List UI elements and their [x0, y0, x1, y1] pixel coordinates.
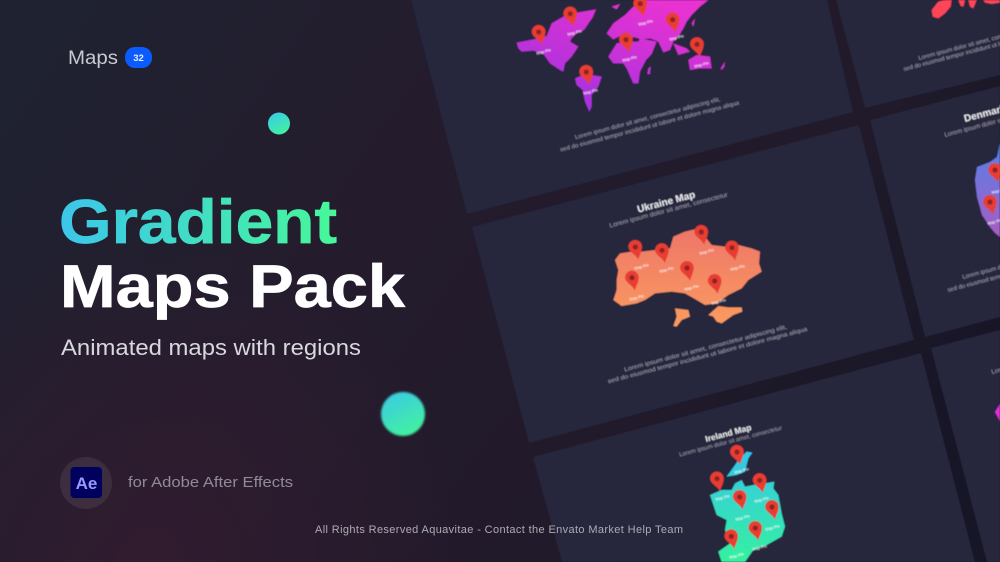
Ireland pin labels: Map Pin — [765, 523, 780, 532]
world map pin labels — [536, 18, 709, 96]
Ireland pin labels: Map Pin — [734, 466, 749, 475]
Ireland pin labels: Map Pin — [752, 543, 767, 552]
count badge — [125, 47, 152, 68]
Ireland pin labels — [715, 466, 780, 560]
world map pin labels: Map Pin — [638, 18, 653, 27]
Ukraine map shape — [613, 228, 762, 327]
panel: Ireland map slide — [533, 353, 975, 562]
panel: red map slide — [836, 0, 1000, 108]
count badge: 32 — [133, 53, 144, 64]
Ukraine pin labels: Map Pin — [711, 297, 726, 306]
title: Maps Pack: Maps Pack — [60, 253, 406, 320]
Ireland pin labels: Map Pin — [735, 513, 750, 522]
panel: world map slide — [411, 0, 853, 214]
panel: Ukraine map slide — [472, 125, 914, 443]
Ireland pins — [710, 445, 779, 549]
copyright footer: All Rights Reserved Aquavitae - Contact the Envato Market Help Team — [315, 524, 683, 536]
Ukraine description: Lorem ipsum dolor sit amet, consectetur adipiscing elit, — [624, 325, 788, 373]
Ireland pin labels: Map Pin — [754, 495, 769, 504]
world map pin labels: Map Pin — [536, 47, 551, 56]
Ukraine subtitle: Lorem ipsum dolor sit amet, consectetur — [609, 191, 729, 230]
platform label: for Adobe After Effects — [128, 474, 293, 491]
subtitle: Animated maps with regions — [61, 335, 361, 360]
magenta map edge — [995, 404, 1000, 421]
world map pin labels: Map Pin — [567, 28, 582, 37]
world map pin labels: Map Pin — [694, 60, 709, 69]
category label: Maps — [68, 48, 118, 69]
world map pin labels: Map Pin — [669, 33, 684, 42]
Ukraine pin labels: Map Pin — [684, 283, 699, 292]
Ireland title: Ireland Map — [704, 422, 752, 444]
world map shape — [517, 0, 725, 112]
panel: lower right map slide — [931, 330, 1000, 562]
Ireland pin labels: Map Pin — [729, 551, 744, 560]
Ireland map shape — [710, 452, 785, 562]
red map shape — [932, 0, 1000, 18]
panel: Denmark map slide — [870, 86, 1000, 337]
Ukraine pin labels: Map Pin — [699, 247, 714, 256]
world map pin labels: Map Pin — [583, 87, 598, 96]
icon: After Effects — [60, 457, 112, 509]
small gradient dot — [268, 112, 290, 134]
Ukraine pin labels: Map Pin — [730, 263, 745, 272]
Ukraine pins — [625, 225, 739, 294]
Ukraine pin labels: Map Pin — [659, 265, 674, 274]
Denmark pin labels — [987, 186, 1000, 226]
icon: After Effects: Ae — [76, 474, 97, 493]
Ukraine pin labels — [629, 247, 745, 306]
Ukraine title: Ukraine Map — [636, 190, 697, 215]
world map description: sed do eiusmod tempor incididunt ut labore et dolore magna aliqua — [560, 100, 741, 154]
title: Gradient: Gradient — [59, 188, 337, 257]
Ukraine description: sed do eiusmod tempor incididunt ut labore et dolore magna aliqua — [607, 327, 809, 385]
Ireland subtitle: Lorem ipsum dolor sit amet, consectetur — [679, 426, 783, 458]
large blurred gradient dot — [381, 392, 425, 436]
world map pins — [532, 0, 704, 85]
world map pin labels: Map Pin — [622, 54, 637, 63]
Ireland pin labels: Map Pin — [715, 493, 730, 502]
Ukraine pin labels: Map Pin — [629, 293, 644, 302]
Denmark pins — [983, 163, 1000, 215]
world map description: Lorem ipsum dolor sit amet, consectetur adipiscing elit, — [574, 97, 721, 141]
Denmark map shape — [975, 143, 1000, 237]
Ukraine pin labels: Map Pin — [634, 262, 649, 271]
